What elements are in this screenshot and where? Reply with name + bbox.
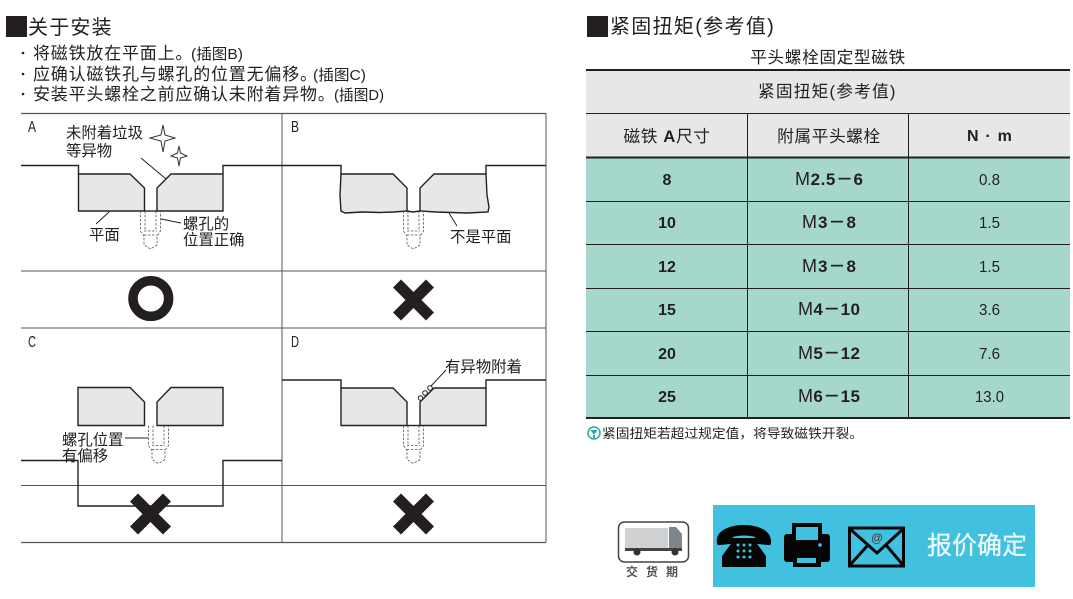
panel A: correct installation: 未附着垃圾 [66,124,143,142]
table headers: 附属平头螺栓 [777,127,881,146]
table headers [623,82,1013,146]
table rows: 25 [658,389,676,406]
table rows: 1.5 [979,215,1000,232]
installation notes: 安装平头螺栓之前应确认未附着异物。 [33,85,336,104]
table rows: 3.6 [979,302,1000,319]
warning note: 紧固扭矩若超过规定值，将导致磁铁开裂。 [602,426,863,441]
panel B: surface not flat: B [291,119,299,136]
table rows: M2.5－6 [795,169,863,189]
table rows: M4－10 [798,299,860,319]
table rows: 15 [658,302,676,319]
installation notes: (插图D) [334,87,384,104]
installation notes: 将磁铁放在平面上。 [33,44,193,63]
icon: email envelope [850,528,904,566]
icon: telephone [717,525,771,567]
panel A: correct installation: 位置正确 [183,231,245,249]
table rows: M3－8 [802,212,856,232]
table caption: 平头螺栓固定型磁铁 [750,48,906,67]
panel A: correct installation: 平面 [89,227,120,244]
panel C: hole misaligned [21,334,282,506]
table rows: 12 [658,259,676,276]
panel A: correct installation: 螺孔的 [183,215,229,233]
installation notes: 应确认磁铁孔与螺孔的位置无偏移。 [33,65,318,84]
panel B: surface not flat [282,119,546,249]
panel A: correct installation: A [28,119,36,136]
installation notes: (插图B) [191,46,243,63]
icon: delivery truck badge: 交货期 [626,564,686,579]
panel A: correct installation: 等异物 [66,142,112,160]
table headers: 磁铁 A尺寸 [623,127,711,146]
panel B: surface not flat: 不是平面 [450,229,512,246]
icon: printer [784,525,830,566]
table rows: 1.5 [979,259,1000,276]
icon: cross mark C [130,494,171,534]
icon: cross mark B [393,280,434,320]
installation grid [21,113,546,542]
torque table [586,70,1070,418]
table headers: N · m [967,128,1013,145]
icon: cross mark D [393,494,434,534]
panel C: hole misaligned: 螺孔位置 [62,431,124,449]
panel D: foreign matter attached: 有异物附着 [445,358,522,376]
icon: email envelope: @ [871,531,883,545]
table rows: 0.8 [979,172,1000,189]
installation notes: (插图C) [313,67,366,84]
table rows: M5－12 [798,343,860,363]
panel D: foreign matter attached: D [291,334,299,351]
installation notes [22,44,384,104]
icon: circle OK mark [133,281,169,316]
contact banner [713,505,1035,587]
table rows [658,169,1004,406]
table rows: 20 [658,346,676,363]
quote confirmation label: 报价确定 [927,532,1027,560]
table rows: M6－15 [798,386,860,406]
table headers: 紧固扭矩(参考值) [758,82,896,101]
table rows: 13.0 [975,389,1004,406]
panel C: hole misaligned: C [28,334,36,351]
panel A: correct installation [21,119,282,249]
table rows: 10 [658,215,676,232]
table rows: 7.6 [979,346,1000,363]
table rows: 8 [663,172,672,189]
panel C: hole misaligned: 有偏移 [62,447,108,465]
panel D: foreign matter attached [282,334,546,464]
heading: torque: 紧固扭矩(参考值) [610,15,775,38]
heading: installation: 关于安装 [28,16,113,39]
table rows: M3－8 [802,256,856,276]
icon: delivery truck badge [618,522,688,579]
